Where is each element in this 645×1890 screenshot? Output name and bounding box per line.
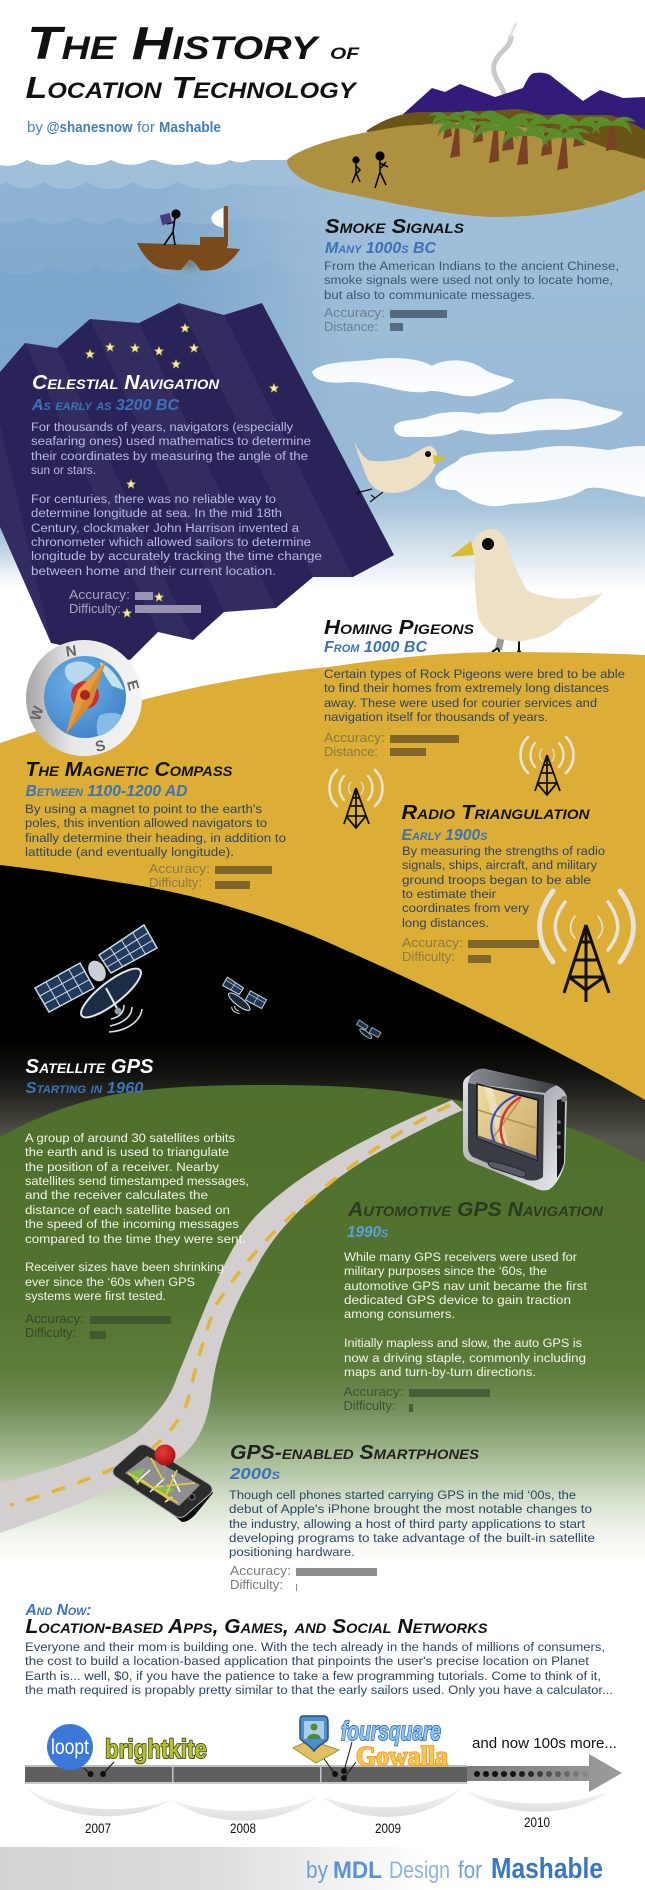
text block: gps-enabled smartphones: 2000s [229,1466,281,1483]
text block: automotive gps navigation: Difficulty: [344,1399,396,1413]
text block: celestial navigation: As early as 3200 BC [31,397,179,414]
title: The History [27,17,320,69]
text block: satellite gps: ever since the ‘60s when GPS [25,1275,195,1289]
year labels: 2009 [375,1820,401,1836]
logo: gowalla: Gowalla [356,1741,448,1771]
text block: celestial navigation [31,372,322,616]
text block: satellite gps: compared to the time they were sent. [25,1232,246,1246]
year labels [85,1814,550,1836]
text block: satellite gps: Accuracy: [25,1312,84,1326]
heading block: smoke signals: Accuracy: [324,306,385,320]
text block: magnetic compass: The Magnetic Compass [26,759,233,781]
text block: celestial navigation: chronometer which allowed sailors to determine [31,535,311,549]
text block: homing pigeons: navigation itself for thousands of years. [324,710,548,724]
heading block: smoke signals: Distance: [324,320,378,334]
text block: magnetic compass [25,759,286,890]
yellow hill [0,652,645,1200]
clouds [312,358,645,506]
text block: radio triangulation: Early 1900s [402,827,488,844]
timeline [25,1742,622,1821]
icon: radio tower left [330,770,382,828]
text block: homing pigeons: From 1000 BC [324,639,427,656]
text block: automotive gps navigation: now a driving staple, commonly including [344,1351,586,1365]
text block: gps-enabled smartphones: GPS-enabled Smartphones [230,1442,480,1464]
byline [27,119,221,136]
text block: automotive gps navigation: 1990s [347,1224,389,1241]
heading block: smoke signals: From the American Indians to the ancient Chinese, [324,259,619,273]
text block: and now location-based apps: And Now: [25,1602,91,1619]
text block: gps-enabled smartphones: positioning hardware. [229,1545,355,1559]
heading block: smoke signals: but also to communicate messages. [324,288,535,302]
byline: @shanesnow [46,119,133,136]
road [0,1100,463,1533]
text block: gps-enabled smartphones: developing programs to take advantage of the built-in satellite [229,1531,595,1545]
text block: gps-enabled smartphones: Difficulty: [230,1578,283,1592]
text block: automotive gps navigation: Initially mapless and slow, the auto GPS is [344,1336,582,1350]
icon: foursquare map pin [293,1716,339,1763]
heading block: smoke signals: Many 1000s BC [325,240,436,257]
text block: automotive gps navigation [344,1199,604,1413]
timeline year arcs [25,1787,612,1821]
text block: gps-enabled smartphones: Accuracy: [230,1564,291,1578]
text block: satellite gps: the position of a receiver. Nearby [25,1160,220,1174]
text block: radio triangulation: coordinates from very [402,901,530,915]
background waves [0,182,306,570]
text block: and now location-based apps: Earth is... well, $0, if you have the patience to take a few programming tutorials. Come to think of it, [25,1669,601,1683]
text block: satellite gps: and the receiver calculates the [25,1188,208,1202]
header white scalloped wave edge [0,0,645,166]
text block: and now location-based apps [25,1602,613,1697]
text block: automotive gps navigation: Accuracy: [344,1385,404,1399]
text block: satellite gps: the speed of the incoming messages [25,1217,239,1231]
text block: radio triangulation: By measuring the strengths of radio [402,844,605,858]
footer credit [306,1853,603,1885]
text block: radio triangulation: long distances. [402,916,489,930]
text block: automotive gps navigation: military purposes since the ‘60s, the [344,1264,547,1278]
text block: radio triangulation [402,802,605,964]
text block: gps-enabled smartphones: Though cell phones started carrying GPS in the mid ‘00s, the [229,1488,576,1502]
text block: celestial navigation: seafaring ones) used mathematics to determine [31,434,311,448]
icon: large satellite [35,925,157,1032]
text block: homing pigeons: away. These were used for courier services and [324,696,597,710]
title: of [330,38,360,65]
green hill [0,1085,645,1600]
year labels: 2010 [524,1814,550,1830]
text block: homing pigeons: Distance: [324,745,378,759]
icon: boat with navigator [137,206,240,279]
stars [86,324,278,617]
text block: magnetic compass: Between 1100-1200 AD [26,783,188,800]
text block: satellite gps: Difficulty: [25,1326,76,1340]
text block: radio triangulation: Radio Triangulation [402,802,590,824]
text block: celestial navigation: sun or stars. [31,463,96,477]
icon: automotive gps device [463,1069,567,1190]
text block: celestial navigation: longitude by accurately tracking the time change [31,549,322,563]
byline: for [137,119,155,136]
text block: and now location-based apps: Everyone and their mom is building one. With the tech already in the hands of millions of consumers, [25,1640,605,1654]
logo: foursquare: foursquare [341,1716,441,1746]
panel: celestial navigation folded star map [0,303,394,660]
purple mountains [401,73,645,170]
text block: celestial navigation: Century, clockmaker John Harrison invented a [31,521,299,535]
text block: and now location-based apps: Location-based Apps, Games, and Social Networks [26,1616,488,1638]
text block: magnetic compass: poles, this invention allowed navigators to [25,816,267,830]
footer credit: MDL [333,1857,382,1884]
text block: automotive gps navigation: While many GPS receivers were used for [344,1250,577,1264]
byline: Mashable [159,119,221,136]
text block: radio triangulation: to estimate their [402,887,496,901]
icon: smartphone with map pin [113,1444,213,1522]
text block: automotive gps navigation: Automotive GPS Navigation [347,1199,604,1221]
footer credit: Design [389,1857,450,1884]
text block: automotive gps navigation: maps and turn-by-turn directions. [344,1365,536,1379]
title: Location Technology [26,70,358,105]
text block: satellite gps: the earth and is used to triangulate [25,1145,229,1159]
text block: and now location-based apps: the math required is propably pretty similar to that the early sailors used. Only you have a calculator... [25,1683,613,1697]
text block: magnetic compass: finally determine their heading, in addition to [25,831,286,845]
text block: celestial navigation: Difficulty: [69,602,121,616]
footer credit: by [306,1857,328,1884]
logo: brightkite: brightkite [105,1734,207,1764]
black night sky [0,865,645,1200]
text block: satellite gps: distance of each satellite based on [25,1203,230,1217]
text block: satellite gps: A group of around 30 satellites orbits [25,1131,235,1145]
text block: satellite gps: Satellite GPS [26,1056,154,1078]
icon: compass: W [27,703,48,723]
large pigeon [450,529,603,656]
icon: small satellite [357,1020,381,1040]
stick figures on island [352,151,388,188]
byline: by [27,119,44,136]
title [26,17,360,105]
text block: gps-enabled smartphones: the industry, allowing a host of third party applications to start [229,1517,586,1531]
heading block: smoke signals: Smoke Signals [325,216,465,238]
small flying pigeon [354,441,448,502]
icon: compass: E [123,678,142,692]
heading block: smoke signals [324,216,619,334]
text block: homing pigeons: to find their homes from extremely long distances [324,681,609,695]
text block: radio triangulation: Difficulty: [402,950,455,964]
icon: compass [26,640,142,756]
text block: magnetic compass: Accuracy: [149,862,210,876]
year labels: 2008 [230,1820,256,1836]
text block: automotive gps navigation: dedicated GPS device to gain traction [344,1293,571,1307]
text block: automotive gps navigation: among consumers. [344,1307,455,1321]
text block: gps-enabled smartphones: debut of Apple's iPhone brought the most notable changes to [229,1502,592,1516]
text block: satellite gps: systems were first tested. [25,1289,166,1303]
icon: large radio tower [540,891,634,1002]
text block: celestial navigation: For thousands of years, navigators (especially [31,420,294,434]
text block: magnetic compass: lattitude (and eventually longitude). [25,845,234,859]
text block: radio triangulation: signals, ships, aircraft, and military [402,858,598,872]
text block: and now location-based apps: the cost to build a location-based application that pinpoints the user's precise location on Planet [25,1654,590,1668]
text block: gps-enabled smartphones [229,1442,595,1592]
text block: homing pigeons [324,617,625,759]
text block: magnetic compass: By using a magnet to point to the earth's [25,802,262,816]
text block: automotive gps navigation: automotive GPS nav unit became the first [344,1279,588,1293]
text block: celestial navigation: their coordinates by measuring the angle of the [31,449,308,463]
text block: radio triangulation: ground troops began to be able [402,873,591,887]
palm trees [428,111,635,170]
text block: satellite gps [25,1056,249,1340]
year labels: 2007 [85,1820,111,1836]
text block: homing pigeons: Certain types of Rock Pigeons were bred to be able [324,667,625,681]
icon: medium satellite [223,977,267,1014]
text block: celestial navigation: determine longitude at sea. In the mid 18th [31,506,282,520]
icon: smoke [494,24,516,93]
footer band [0,1847,645,1890]
text block: magnetic compass: Difficulty: [149,876,202,890]
text block: celestial navigation: For centuries, there was no reliable way to [31,492,276,506]
text block: celestial navigation: Accuracy: [69,588,130,602]
ocean and sky background [0,160,645,590]
label: and now 100s more: and now 100s more... [472,1735,617,1752]
text block: radio triangulation: Accuracy: [402,936,463,950]
text block: celestial navigation: Celestial Navigation [32,372,220,394]
logo: loopt: loopt [51,1736,89,1759]
text block: satellite gps: satellites send timestamped messages, [25,1174,249,1188]
logo: loopt [47,1724,93,1770]
text block: satellite gps: Receiver sizes have been shrinking [25,1260,224,1274]
icon: radio tower top right [520,737,574,795]
text block: homing pigeons: Accuracy: [324,731,385,745]
heading block: smoke signals: smoke signals were used not only to locate home, [324,273,613,287]
footer credit: Mashable [491,1853,603,1885]
icon: compass: S [93,737,107,756]
island [287,109,645,217]
icon: compass: N [65,642,78,661]
text block: homing pigeons: Homing Pigeons [324,617,475,639]
text block: satellite gps: Starting in 1960 [26,1080,144,1097]
text block: celestial navigation: between home and their current location. [31,564,276,578]
footer credit: for [458,1857,482,1884]
